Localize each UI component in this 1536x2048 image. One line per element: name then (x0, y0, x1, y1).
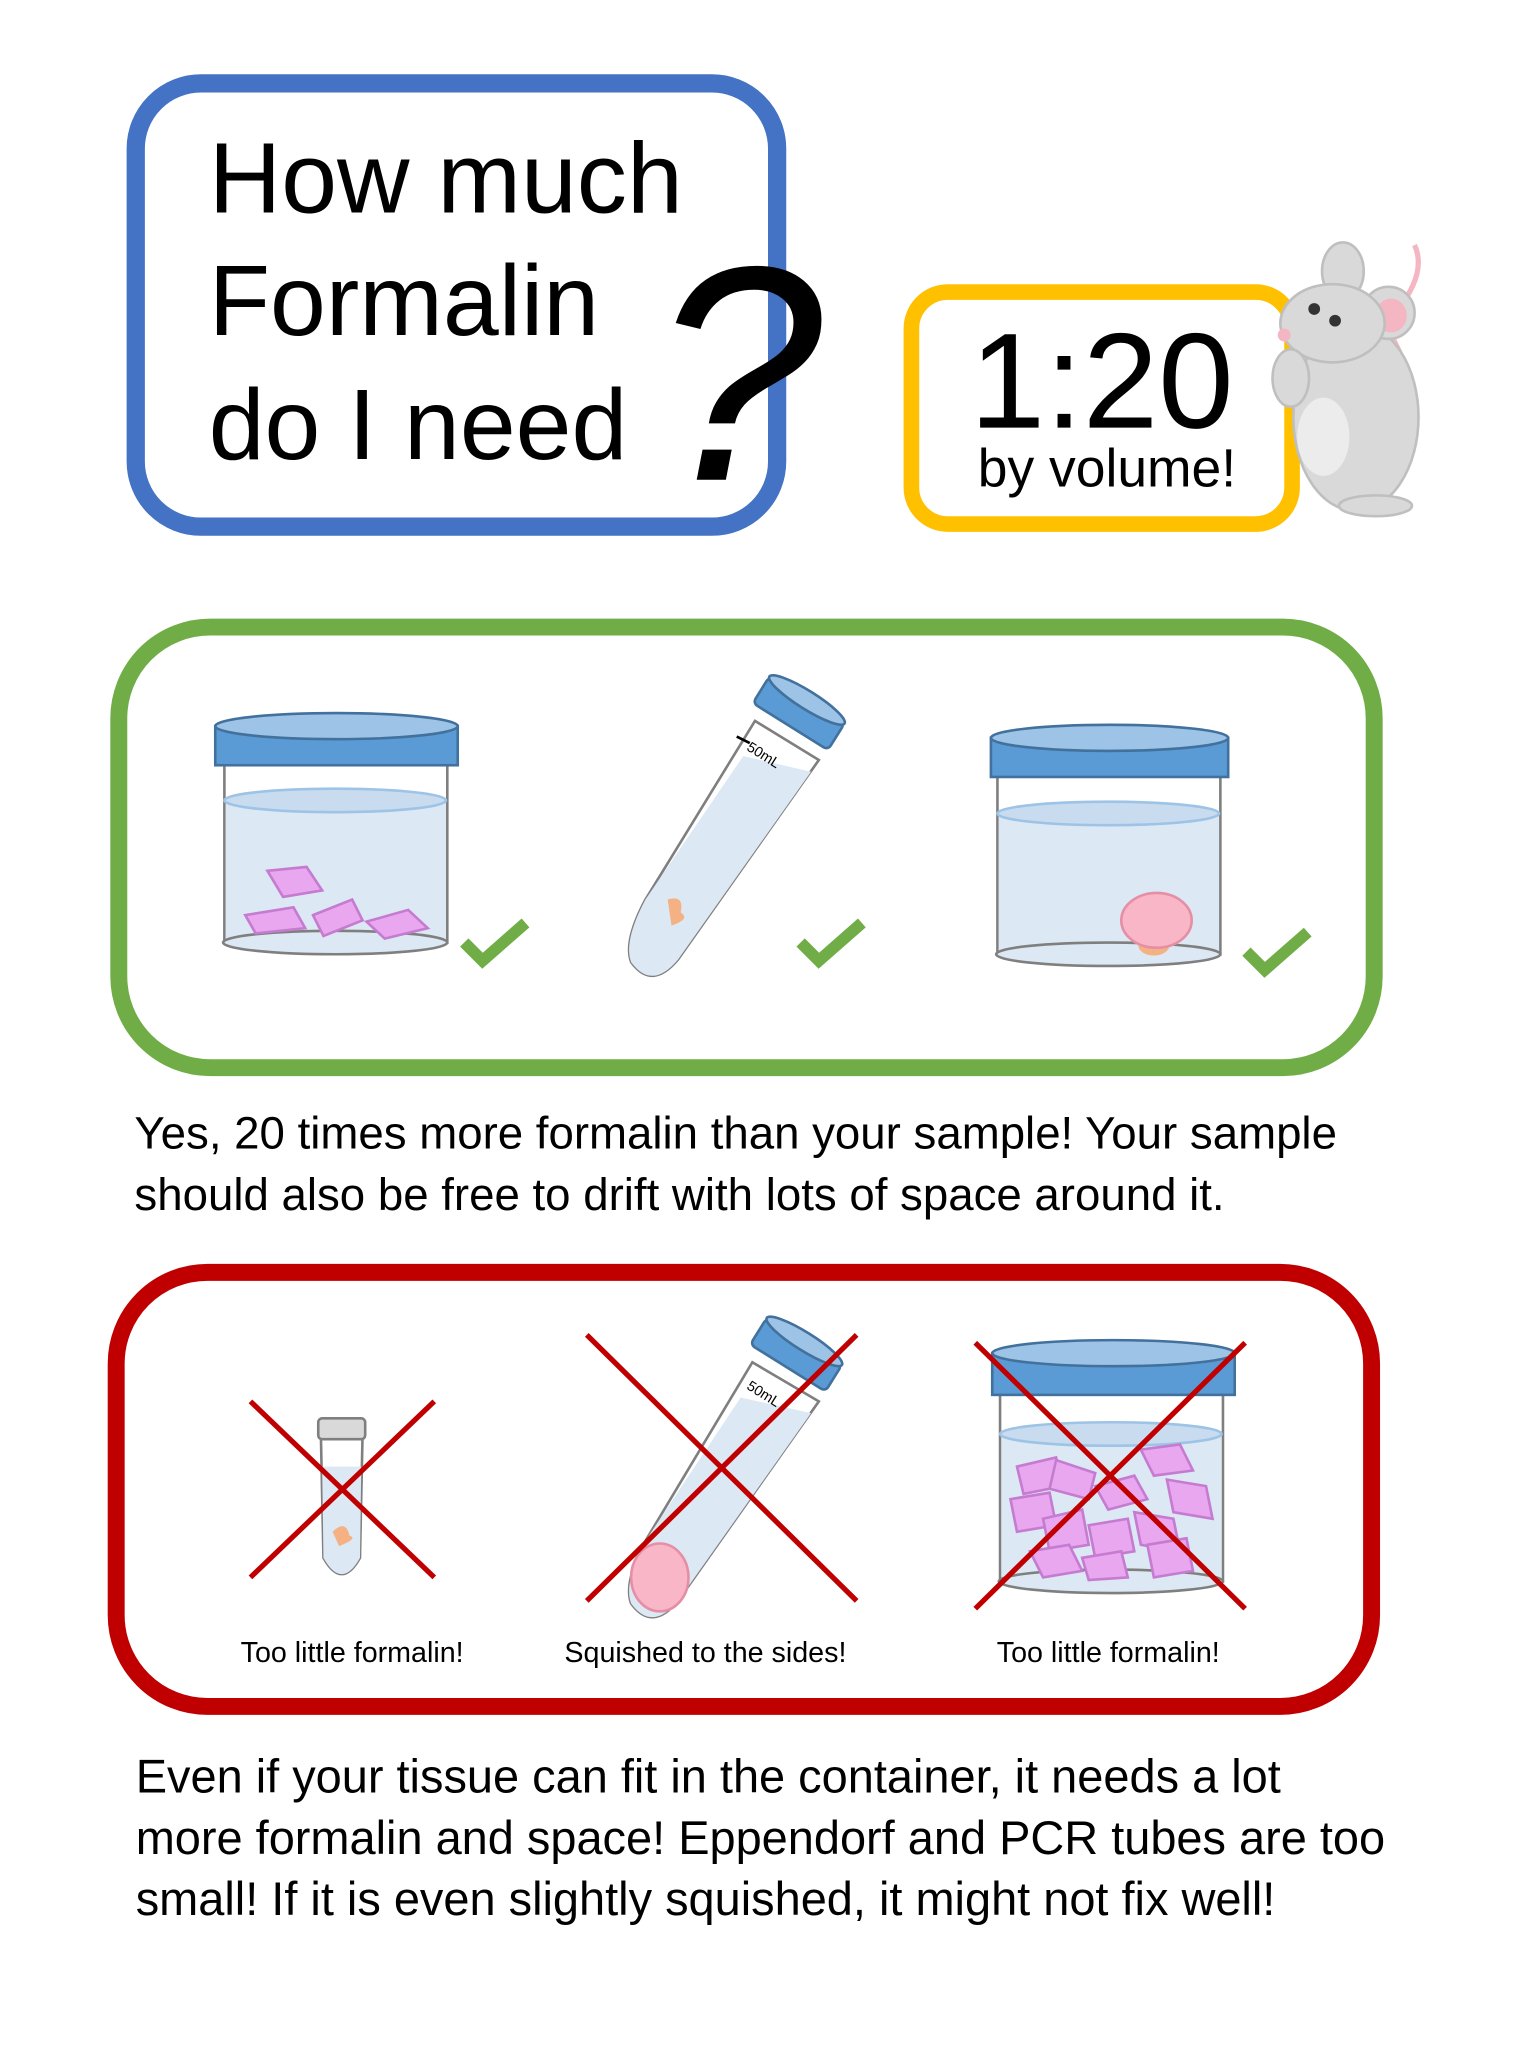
caption 3: Too little formalin! (997, 1637, 1220, 1669)
50mL tube: 50mL (744, 739, 783, 772)
panel: correct examples (119, 627, 1374, 1068)
text block: correct explanation: Yes, 20 times more formalin than your sample! Your sample (134, 1107, 1337, 1158)
squished tube: 50mL (744, 1378, 783, 1411)
icon: check 3 (1246, 932, 1308, 970)
ratio box: 1:20 (970, 305, 1234, 457)
title text: do I need (209, 369, 627, 481)
text block: wrong explanation (136, 1750, 1385, 1925)
50mL tube (629, 669, 849, 976)
ratio box: by volume! (978, 439, 1236, 498)
question mark: ? (652, 203, 824, 545)
jar with slices (215, 713, 458, 954)
icon: check 2 (801, 923, 862, 961)
icon: mouse (1273, 242, 1419, 516)
text block: wrong explanation: small! If it is even slightly squished, it might not fix well! (136, 1873, 1275, 1925)
title text (209, 122, 683, 481)
text block: wrong explanation: Even if your tissue can fit in the container, it needs a lot (136, 1750, 1281, 1802)
small tube (250, 1401, 434, 1577)
title text: How much (209, 122, 683, 234)
ratio box (911, 292, 1292, 524)
jar with brain (991, 725, 1228, 966)
squished tube (587, 1310, 857, 1617)
caption 1: Too little formalin! (241, 1637, 464, 1669)
crowded jar (975, 1340, 1245, 1609)
title text: Formalin (209, 245, 599, 357)
text block: wrong explanation: more formalin and space! Eppendorf and PCR tubes are too (136, 1812, 1385, 1864)
text block: correct explanation (134, 1107, 1337, 1220)
caption 2: Squished to the sides! (564, 1637, 846, 1669)
text block: correct explanation: should also be free to drift with lots of space around it. (134, 1169, 1225, 1220)
icon: check 1 (464, 923, 526, 961)
panel: wrong examples (116, 1272, 1372, 1706)
title box (136, 83, 824, 545)
